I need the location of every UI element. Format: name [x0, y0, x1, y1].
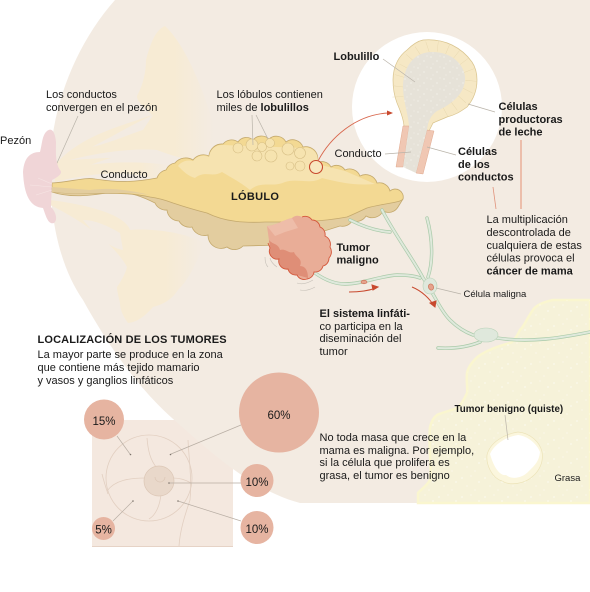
label: malignant tumor: Tumor: [336, 242, 370, 254]
torso diagram base: [92, 420, 233, 546]
lymphatic system: [315, 210, 590, 348]
bubble: 10% lower right: [240, 511, 274, 544]
pale mammary lobes and ducts: [50, 26, 214, 323]
bubble: 5%: 5%: [95, 524, 112, 536]
lobe gaps: [70, 115, 157, 160]
label: lobulillo: Lobulillo: [334, 51, 380, 63]
label: duct cells: conductos: [458, 172, 514, 184]
arrows in lymphatic vessels: [349, 285, 436, 307]
malignant tumor: [267, 216, 331, 280]
text: location description: La mayor parte se produce en la zona: [38, 349, 223, 361]
tumor vibration marks: [265, 257, 315, 290]
background: breast silhouette: [50, 0, 590, 503]
text: uncontrolled multiplication: células provoca el: [486, 252, 575, 264]
bubble: 10% right: [240, 464, 274, 497]
bubble: 15%: 15%: [92, 416, 116, 428]
label: fat: Grasa: [554, 473, 581, 484]
magnifier marker and arrow: [310, 110, 393, 174]
fat tissue area: [418, 300, 590, 503]
cyst: benign tumor: [487, 432, 542, 484]
text: lymphatic system: tumor: [320, 346, 348, 358]
label: malignant cell: Célula maligna: [464, 289, 527, 300]
text: location description: y vasos y ganglios linfáticos: [38, 375, 174, 387]
bubble: 60%: 60%: [267, 410, 291, 422]
text: uncontrolled multiplication: La multiplicación: [486, 214, 568, 226]
bubble: 15%: [84, 400, 124, 440]
label: lobes contain: miles de: [216, 102, 261, 114]
label: lobes contain: Los lóbulos contienen: [216, 89, 323, 101]
text: lymphatic system: El sistema linfáti-: [320, 308, 410, 320]
label: ducts converge: convergen en el pezón: [46, 102, 157, 114]
label: malignant tumor: maligno: [336, 254, 379, 266]
labels: anatomy: [0, 51, 582, 484]
nipple: [23, 130, 61, 223]
label: lobes contain: lobulillos: [261, 102, 309, 114]
text: lymphatic system: co participa en la: [320, 321, 404, 333]
text: uncontrolled multiplication: descontrolada de: [486, 227, 571, 239]
lobule highlights: [178, 145, 375, 190]
bubble: 10% lower right: 10%: [245, 524, 269, 536]
bubble: 10% right: 10%: [245, 477, 269, 489]
main lobule with duct: [52, 136, 403, 250]
label: inset conducto: Conducto: [334, 148, 382, 160]
torso diagram: [92, 435, 233, 546]
text: not all masses malignant: No toda masa que crece en la: [320, 432, 466, 444]
malignant cells in vessels: [361, 280, 434, 291]
label: conducto: Conducto: [100, 169, 148, 181]
label: duct cells: de los: [458, 159, 490, 171]
label: lóbulo: LÓBULO: [231, 190, 279, 203]
label: pezón: Pezón: [0, 135, 31, 147]
label: benign tumor: Tumor benigno (quiste): [454, 404, 563, 415]
bubble: 60%: [239, 372, 319, 452]
text: uncontrolled multiplication: cualquiera de estas: [486, 240, 582, 252]
text: uncontrolled multiplication: cáncer de mama: [486, 266, 574, 278]
label: milk cells: Células: [498, 101, 538, 113]
label: duct cells: Células: [458, 146, 497, 158]
text: not all masses malignant: grasa, el tumor es benigno: [320, 470, 450, 482]
label: milk cells: productoras: [498, 114, 563, 126]
label: milk cells: de leche: [498, 126, 543, 138]
percentage pointer lines: [113, 425, 241, 521]
heading: tumor location: LOCALIZACIÓN DE LOS TUMORES: [38, 333, 227, 346]
text: not all masses malignant: si la célula que prolifera es: [320, 457, 450, 469]
text: lymphatic system: diseminación del: [320, 333, 401, 345]
pointer lines: [53, 59, 508, 440]
connector to cancer text: [493, 140, 521, 209]
text: location description: que contiene más tejido mamario: [38, 362, 200, 374]
label: ducts converge: Los conductos: [46, 89, 117, 101]
bubble: 5%: [92, 517, 115, 540]
text: not all masses malignant: mama es maligna. Por ejemplo,: [320, 445, 474, 457]
inset: lobulillo: [352, 32, 502, 182]
